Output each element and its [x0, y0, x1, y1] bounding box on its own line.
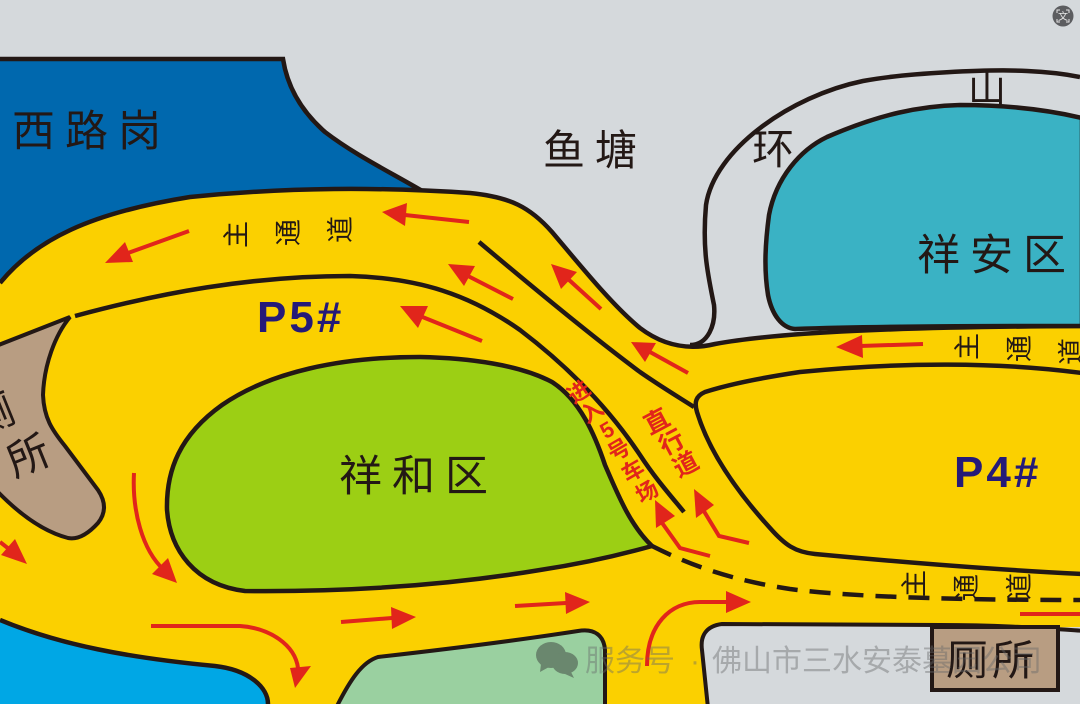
road label lower right: 道 — [1005, 573, 1035, 600]
arrow: through lane entry — [694, 489, 749, 543]
road label lower right — [900, 570, 1035, 601]
watermark — [536, 642, 1042, 678]
arrow: lane to P5 — [400, 306, 482, 341]
arrow: upper road top — [382, 203, 469, 226]
zone: green 祥和区 — [167, 357, 652, 591]
dashed road divider — [652, 546, 1080, 600]
label: 进入5号车场: 场 — [631, 476, 663, 508]
label: 直行道: 行 — [654, 425, 690, 461]
zone: restroom box: 厕所 — [946, 637, 1038, 684]
yellow road network — [0, 189, 1080, 704]
icon: scan button — [1052, 6, 1074, 26]
zone: light blue lower left — [0, 610, 280, 704]
road label lower right: 通 — [952, 574, 982, 601]
label: 厕所 left: 所 — [0, 427, 57, 486]
road label upper left: 道 — [326, 216, 356, 243]
zone: dark blue 西路岗 — [0, 59, 424, 290]
icon: scan button: 文 — [1058, 10, 1068, 23]
heading: 祥和区: 祥和区 — [339, 453, 498, 501]
label: 进入5号车场: 5 — [595, 416, 619, 444]
watermark text: 佛山市三水安泰墓园公司 — [712, 645, 1042, 678]
label: 环山: 山 — [968, 69, 1006, 111]
road label lower right: 主 — [900, 570, 930, 597]
arrow: curved left — [134, 473, 177, 583]
road label upper left: 通 — [274, 219, 304, 246]
parking lot P5 upper line — [75, 276, 684, 512]
label: 进入5号车场: 入 — [576, 396, 608, 428]
heading: 鱼塘: 鱼塘 — [543, 127, 647, 174]
arrow: lower road 1 — [341, 607, 416, 629]
through lane divider — [479, 242, 694, 407]
parking label P5: P5# — [257, 293, 344, 342]
arrow: far left stub — [0, 539, 27, 564]
heading: 西路岗: 西路岗 — [12, 108, 171, 156]
road label upper left — [222, 216, 356, 248]
label: 进入5号车场: 进 — [563, 375, 595, 409]
grey area with lower road edge — [702, 624, 1080, 704]
arrow: upper road far left — [105, 231, 189, 263]
heading: 祥安区: 祥安区 — [917, 232, 1076, 280]
arrow: lower road 2 — [515, 592, 590, 614]
label: 环山: 环 — [752, 126, 794, 173]
arrow: junction — [631, 342, 688, 373]
label: 环山 — [752, 69, 1006, 173]
road edge: lower left outline — [0, 620, 268, 704]
arrow: entering P5 — [655, 500, 710, 556]
watermark text: 服务号 — [585, 645, 675, 678]
road label upper left: 主 — [222, 221, 252, 248]
label: 进入5号车场: 车 — [617, 455, 649, 487]
label: 进入5号车场 — [563, 375, 663, 508]
parking lot P4 outline — [696, 365, 1080, 574]
zone: teal 祥安区 — [765, 105, 1080, 329]
ring road line — [690, 70, 1080, 345]
arrow: right road — [836, 335, 923, 358]
label: 直行道 — [639, 404, 704, 483]
label: 进入5号车场: 号 — [603, 434, 635, 466]
parking label P4: P4# — [954, 448, 1041, 497]
zone: pale green lower — [336, 630, 605, 704]
arrow: through lane 1 — [448, 264, 513, 299]
arrow: curved down — [151, 626, 311, 688]
road label right — [953, 333, 1080, 365]
arrow: through lane 2 — [551, 264, 601, 309]
road label right: 通 — [1005, 335, 1035, 362]
label: 厕所 left — [0, 378, 57, 492]
road label right: 主 — [953, 333, 983, 360]
watermark text: · — [690, 645, 700, 678]
zone: restroom box — [932, 627, 1058, 690]
zone: brown restroom left — [0, 317, 104, 538]
arrow: curved to right — [647, 591, 751, 666]
label: 直行道: 道 — [668, 447, 704, 483]
arrow: lower right stub — [1020, 612, 1080, 616]
label: 直行道: 直 — [639, 404, 675, 440]
icon: wechat — [536, 642, 578, 678]
road edge: upper outline — [0, 189, 1080, 347]
